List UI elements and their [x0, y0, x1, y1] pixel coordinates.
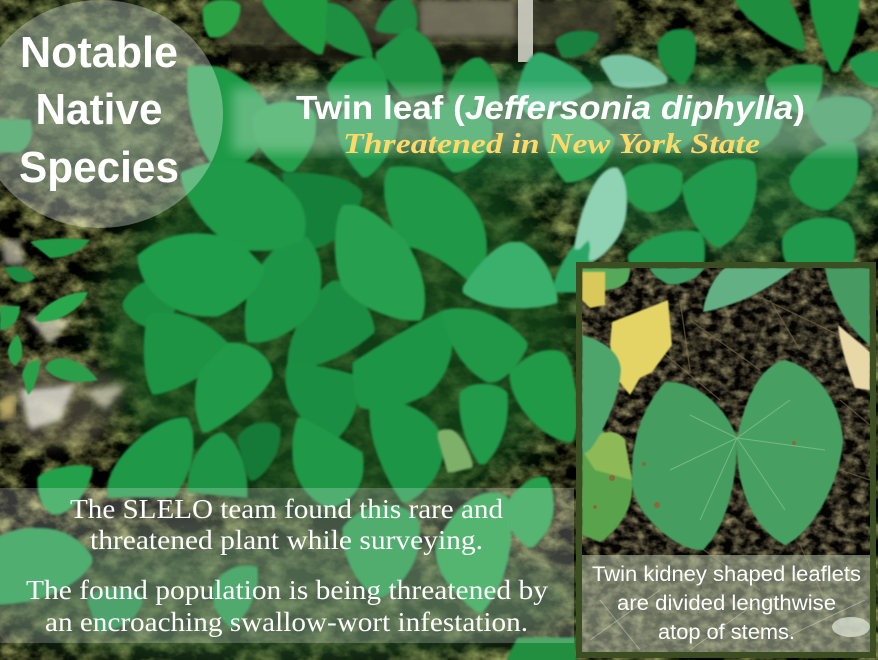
circle heading: Native: [36, 85, 162, 134]
description text: threat: an encroaching swallow-wort infestation.: [45, 607, 528, 637]
inset photo panel: [576, 262, 876, 658]
circle heading: Species: [19, 143, 179, 192]
inset caption: [582, 555, 870, 652]
caption text: atop of stems.: [658, 621, 795, 644]
circle heading: [19, 28, 179, 192]
caption text: [592, 563, 861, 644]
inset photo: [582, 268, 870, 652]
species title: Twin leaf ( Jeffersonia diphylla ): [296, 89, 805, 126]
description text: discovery: threatened plant while surveying.: [90, 525, 483, 555]
description panel: [0, 488, 574, 643]
caption text: are divided lengthwise: [617, 592, 836, 615]
leaves: small left seedlings: [0, 239, 98, 395]
description text: discovery: [70, 494, 504, 555]
caption text: Twin kidney shaped leaflets: [592, 563, 861, 586]
circle heading: Notable: [20, 28, 178, 77]
description text: threat: The found population is being threatened by: [26, 575, 549, 605]
leaves: central twin leaf colony: [40, 163, 575, 512]
leaves: lower area behind the text band: [0, 479, 574, 660]
title band: [232, 88, 878, 152]
description text: discovery: The SLELO team found this rare and: [70, 494, 504, 524]
status subtitle: Threatened in New York State: [343, 129, 760, 160]
leaves: top canopy: [0, 0, 878, 290]
description text: threat: [26, 575, 549, 637]
notable native species circle: [0, 0, 223, 228]
